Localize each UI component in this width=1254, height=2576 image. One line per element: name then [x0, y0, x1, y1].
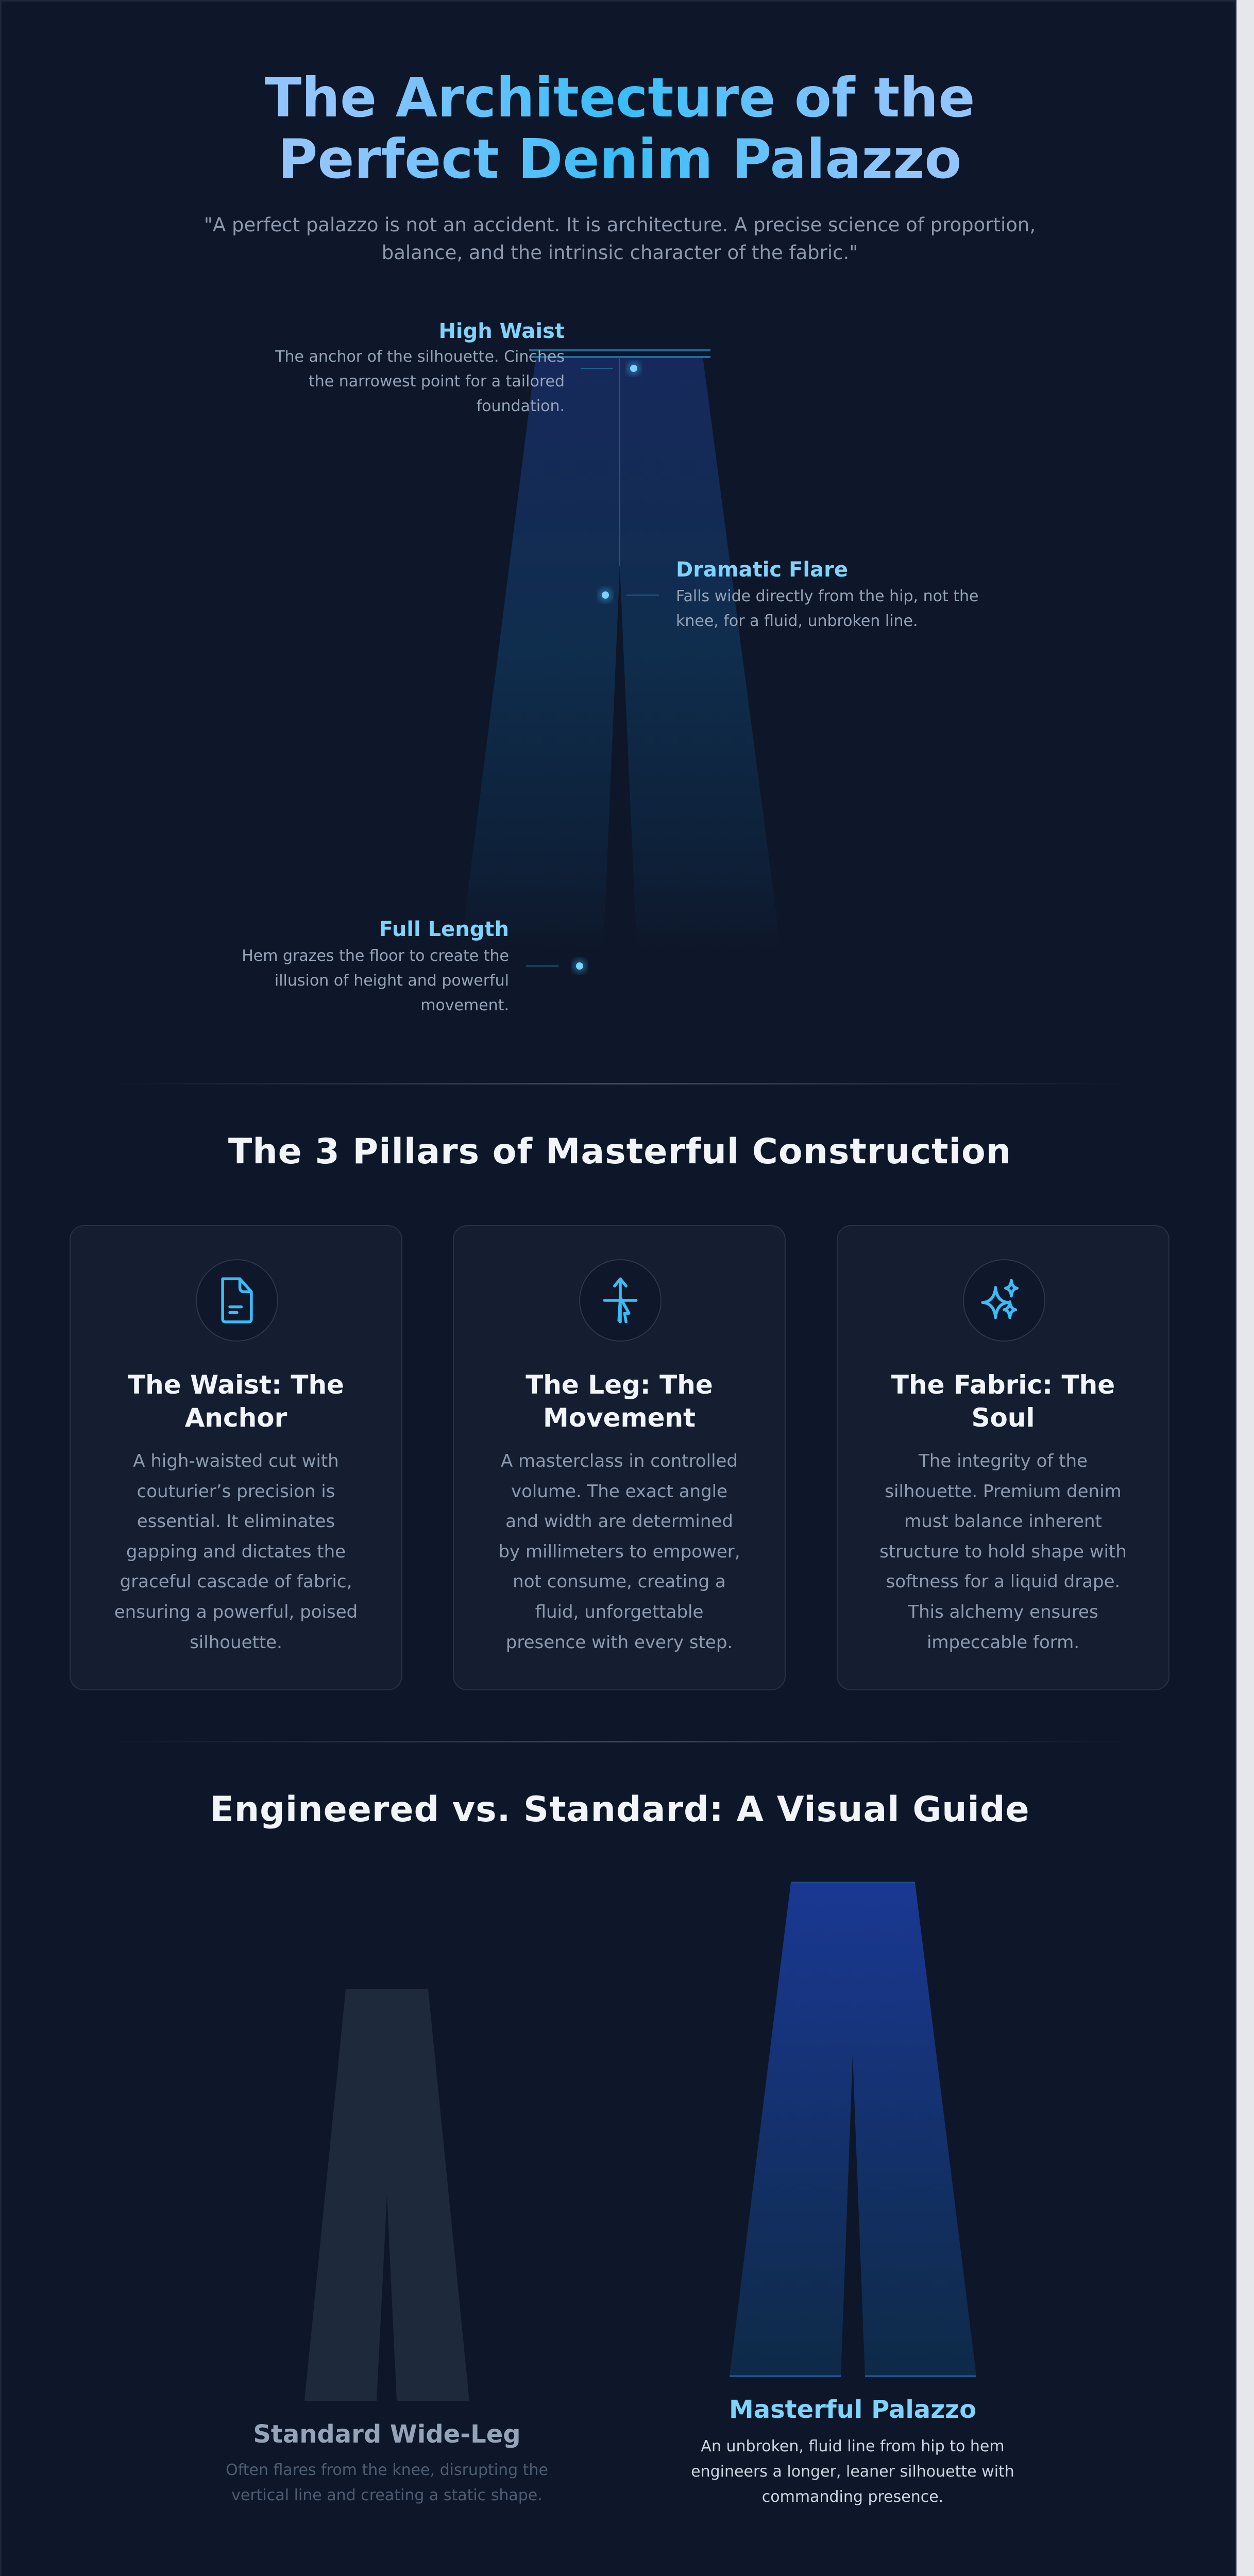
card text: volume. The exact angle [511, 1481, 727, 1502]
card text: couturier’s precision is [137, 1481, 335, 1502]
card text: by millimeters to empower, [498, 1541, 740, 1562]
title: Perfect Denim Palazzo [278, 128, 962, 191]
card text: A masterclass in controlled [501, 1451, 738, 1471]
chart: comparison silhouettes [304, 1882, 976, 2401]
title: The Architecture of the [265, 66, 975, 129]
title [265, 66, 975, 191]
card title: Anchor [185, 1403, 287, 1433]
callout: high waist [275, 319, 565, 415]
callout: high waist: High Waist [438, 319, 565, 343]
card text: silhouette. [190, 1632, 282, 1653]
card text: The integrity of the [919, 1451, 1088, 1471]
heading: 3 pillars: The 3 Pillars of Masterful Construction [228, 1131, 1011, 1172]
callout: dramatic flare: Falls wide directly from the hip, not the [676, 587, 979, 605]
card title: Movement [543, 1403, 696, 1433]
label: standard wide-leg: Standard Wide-Leg [253, 2420, 521, 2449]
label: masterful palazzo: engineers a longer, leaner silhouette with [691, 2463, 1014, 2481]
callout: full length: Hem grazes the floor to create the [242, 947, 509, 965]
callout: dramatic flare: knee, for a fluid, unbroken line. [676, 612, 918, 630]
callout: dramatic flare: Dramatic Flare [676, 558, 848, 582]
diagram: palazzo silhouette [467, 349, 774, 975]
card text: essential. It eliminates [137, 1511, 335, 1532]
card text: A high-waisted cut with [133, 1451, 339, 1471]
palazzo pants [730, 1883, 976, 2376]
callout: high waist: foundation. [477, 397, 565, 415]
card title: The Fabric: The [891, 1370, 1115, 1400]
label: masterful palazzo [691, 2395, 1014, 2506]
subtitle quote [204, 214, 1036, 264]
callout: dramatic flare [676, 558, 979, 630]
card title: Soul [971, 1403, 1035, 1433]
label: masterful palazzo: commanding presence. [762, 2488, 943, 2506]
card text: softness for a liquid drape. [886, 1571, 1120, 1592]
panel: fabric card [837, 1225, 1170, 1690]
card text [114, 1451, 358, 1653]
card title: The Leg: The [526, 1370, 713, 1400]
card title [891, 1370, 1115, 1433]
card text: presence with every step. [506, 1632, 733, 1653]
icon: movement [579, 1259, 662, 1342]
callout: full length: movement. [420, 996, 509, 1014]
card title [526, 1370, 713, 1433]
card text: silhouette. Premium denim [885, 1481, 1122, 1502]
callout: high waist: the narrowest point for a tailored [309, 372, 565, 391]
icon: sparkles [963, 1259, 1045, 1342]
card title: The Waist: The [128, 1370, 344, 1400]
label: standard wide-leg [226, 2420, 548, 2504]
card title [128, 1370, 344, 1433]
card text: graceful cascade of fabric, [120, 1571, 352, 1592]
card text: not consume, creating a [513, 1571, 726, 1592]
card text: ensuring a powerful, poised [114, 1602, 358, 1622]
card text [879, 1451, 1127, 1653]
card text: This alchemy ensures [908, 1602, 1098, 1622]
subtitle quote: "A perfect palazzo is not an accident. It is architecture. A precise science of proportion, [204, 214, 1036, 236]
card text: must balance inherent [904, 1511, 1102, 1532]
card text: and width are determined [505, 1511, 733, 1532]
card text: impeccable form. [927, 1632, 1079, 1653]
label: standard wide-leg: Often flares from the knee, disrupting the [226, 2461, 548, 2479]
label: masterful palazzo: Masterful Palazzo [729, 2395, 976, 2424]
icon: document [196, 1259, 278, 1342]
label: standard wide-leg: vertical line and creating a static shape. [231, 2486, 543, 2504]
card text: fluid, unforgettable [535, 1602, 703, 1622]
callout: full length [242, 918, 509, 1014]
callout: full length: Full Length [379, 918, 509, 941]
card text: structure to hold shape with [879, 1541, 1127, 1562]
card text [498, 1451, 740, 1653]
label: masterful palazzo: An unbroken, fluid line from hip to hem [701, 2437, 1005, 2455]
callout: full length: illusion of height and powerful [275, 972, 509, 990]
panel: waist card [70, 1225, 402, 1690]
standard pants [304, 1989, 469, 2401]
panel: leg card [453, 1225, 786, 1690]
callout: high waist: The anchor of the silhouette. Cinches [275, 348, 565, 366]
heading: visual guide: Engineered vs. Standard: A Visual Guide [210, 1789, 1030, 1830]
subtitle quote: balance, and the intrinsic character of the fabric." [382, 242, 858, 264]
card text: gapping and dictates the [126, 1541, 346, 1562]
